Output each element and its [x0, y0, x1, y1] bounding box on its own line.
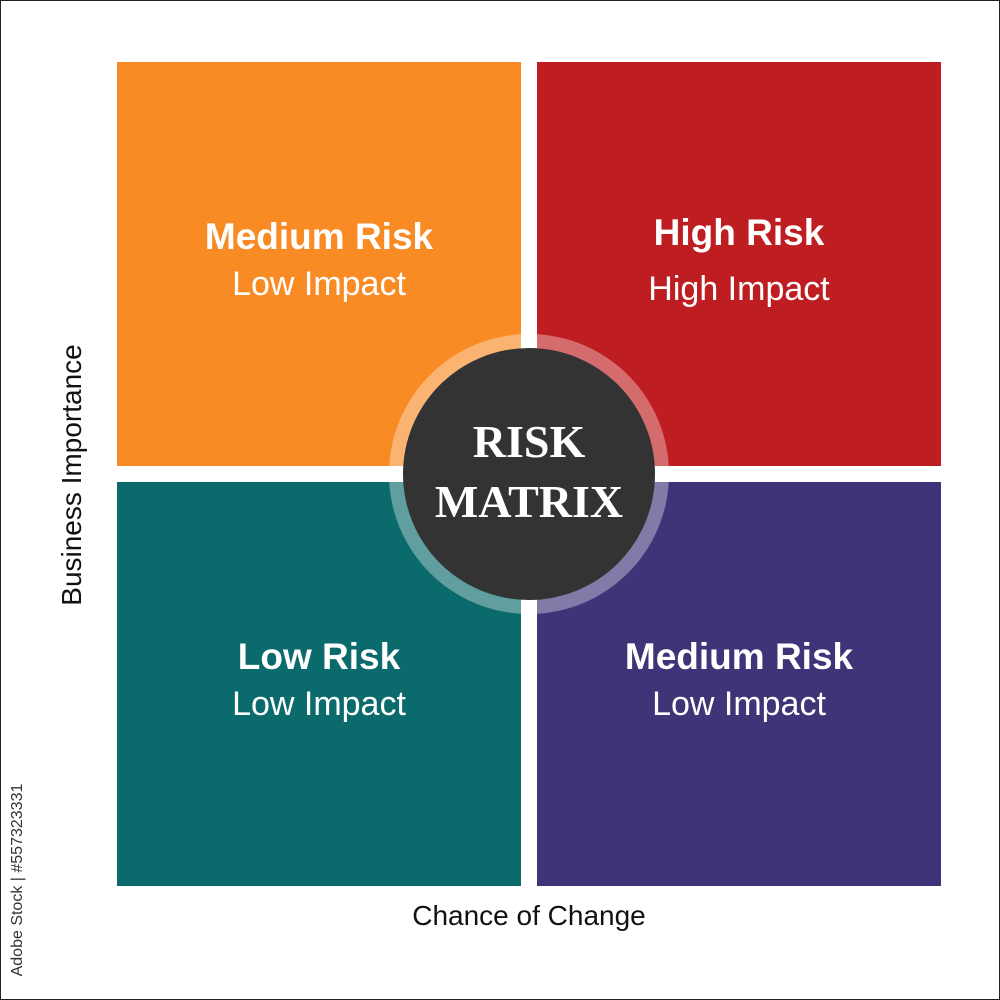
heading: low risk: Low Risk — [238, 636, 400, 677]
panel: top-right high risk — [537, 62, 941, 466]
heading: medium risk: Medium Risk — [205, 216, 433, 257]
text: low impact: Low Impact — [652, 685, 826, 723]
text: high impact: High Impact — [648, 270, 830, 308]
text: low impact: Low Impact — [232, 265, 406, 303]
center circle: risk matrix — [389, 334, 669, 614]
text: low impact: Low Impact — [232, 685, 406, 723]
panel: bottom-left low risk — [117, 482, 521, 886]
axis label: chance of change: Chance of Change — [412, 900, 646, 931]
heading: medium risk: Medium Risk — [625, 636, 853, 677]
panel: bottom-right medium risk — [537, 482, 941, 886]
dark circle with title: MATRIX — [435, 476, 623, 527]
dark circle with title — [403, 348, 655, 600]
watermark id: Adobe Stock | #557323331 — [9, 784, 26, 976]
panel: top-left medium risk — [117, 62, 521, 466]
dark circle with title: RISK — [473, 416, 585, 467]
axis label: business importance: Business Importance — [56, 344, 87, 606]
heading: high risk: High Risk — [654, 212, 824, 253]
